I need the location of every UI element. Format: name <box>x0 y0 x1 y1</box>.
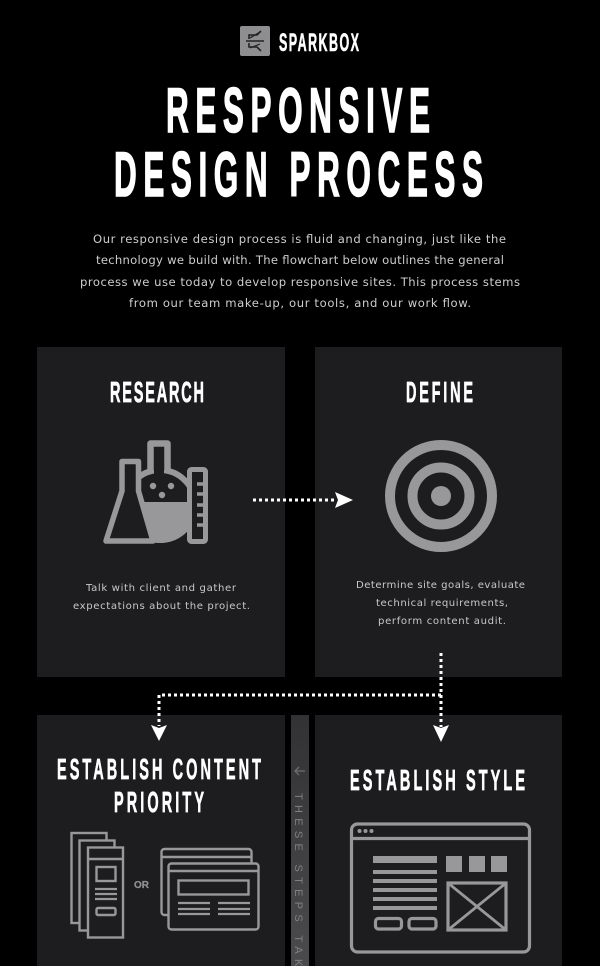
intro paragraph: process we use today to develop responsive sites. This process stems <box>80 275 520 289</box>
icon: desktop windows <box>162 849 258 930</box>
icon: flasks and test tube <box>106 444 206 543</box>
arrow: define to content priority and style <box>151 653 449 742</box>
panel: establish style <box>315 715 562 966</box>
text: research description <box>73 583 250 612</box>
intro paragraph <box>80 232 520 310</box>
heading: research: RESEARCH <box>110 375 204 408</box>
logo: Sparkbox <box>240 26 359 57</box>
panel: research <box>37 347 285 677</box>
intro paragraph: from our team make-up, our tools, and our work flow. <box>129 296 471 310</box>
panel: establish content priority <box>37 715 285 966</box>
text: define description: Determine site goals, evaluate <box>356 580 525 591</box>
heading: establish content priority <box>57 752 261 818</box>
panel: define <box>315 347 562 677</box>
title <box>114 75 483 210</box>
icon: mobile page stack <box>72 833 123 938</box>
heading: define: DEFINE <box>406 375 473 408</box>
text: define description: technical requirements, <box>376 598 508 609</box>
icon: Sparkbox mark <box>240 26 270 56</box>
icon: style guide window <box>352 824 530 952</box>
title: DESIGN PROCESS <box>114 139 483 210</box>
text: define description <box>356 580 525 627</box>
arrow: research to define <box>253 492 353 508</box>
text: research description: expectations about the project. <box>73 601 250 612</box>
logo wordmark: SPARKBOX <box>279 29 359 57</box>
text: define description: perform content audit. <box>378 616 506 627</box>
icon: target <box>390 445 492 547</box>
intro paragraph: technology we build with. The flowchart below outlines the general <box>96 253 504 267</box>
title: RESPONSIVE <box>166 75 430 146</box>
heading: establish content priority: PRIORITY <box>114 785 204 818</box>
side strip: these steps take <box>291 715 309 966</box>
arrow: strip left arrow <box>295 767 305 775</box>
text: research description: Talk with client and gather <box>85 583 237 594</box>
heading: establish style: ESTABLISH STYLE <box>350 763 525 796</box>
label: or: OR <box>134 880 150 891</box>
heading: establish content priority: ESTABLISH CONTENT <box>57 752 261 785</box>
intro paragraph: Our responsive design process is fluid and changing, just like the <box>93 232 506 246</box>
